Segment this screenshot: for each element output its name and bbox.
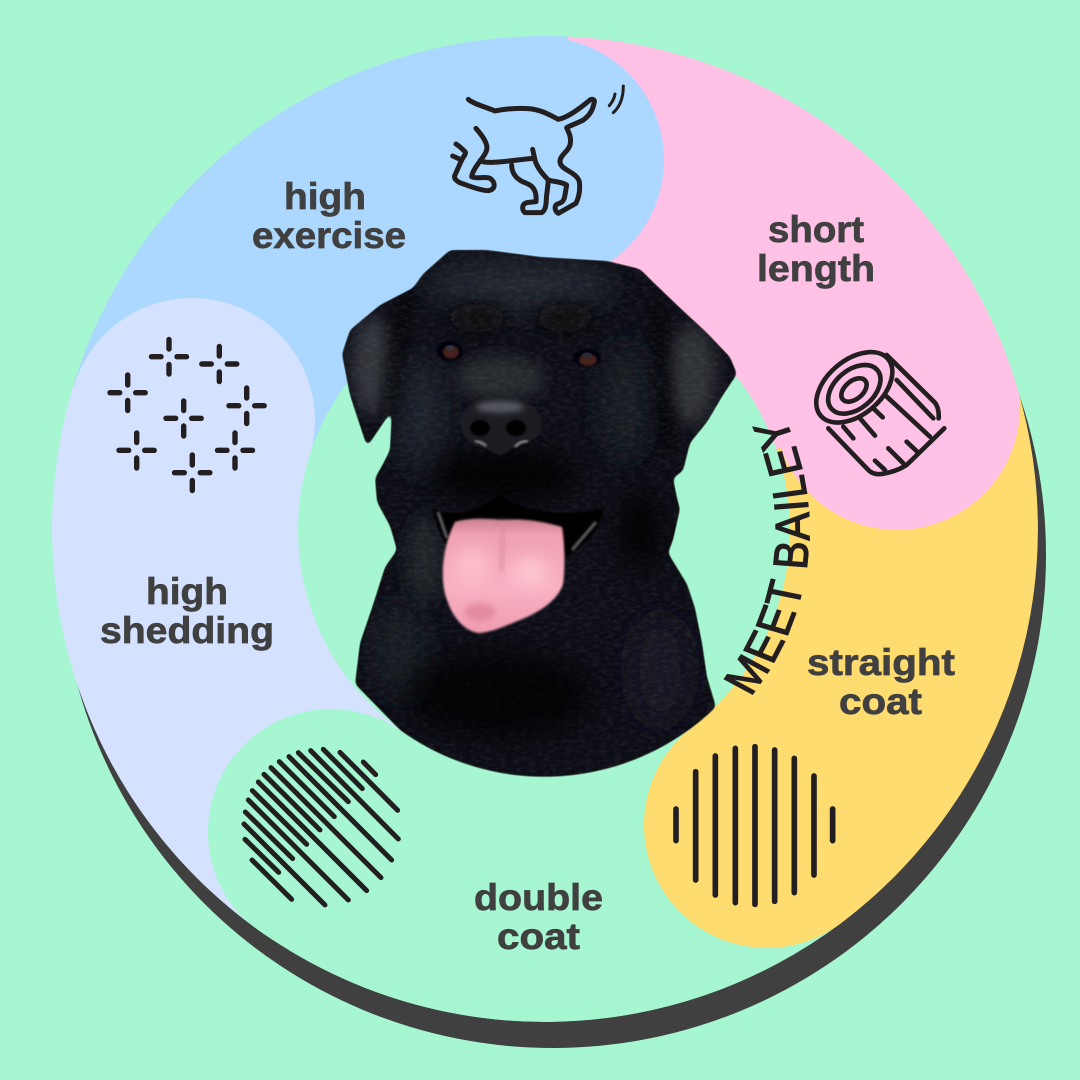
mouth xyxy=(433,494,604,558)
dog portrait xyxy=(330,240,750,780)
segment head: double coat xyxy=(208,709,403,942)
tongue xyxy=(443,519,564,633)
label: double coat: coat xyxy=(497,916,580,957)
segment body: double coat xyxy=(262,726,842,1022)
label: double coat xyxy=(474,877,603,957)
icon: double coat diagonal hatching xyxy=(244,749,398,905)
icon: dog wagging tail xyxy=(453,86,623,213)
segment body: short length xyxy=(568,36,1011,450)
eye left xyxy=(437,341,463,361)
label: high exercise: exercise xyxy=(252,215,406,256)
label: straight coat xyxy=(807,642,955,722)
label: high shedding: high xyxy=(146,571,228,612)
segment body: high exercise xyxy=(74,36,568,452)
label: high exercise: high xyxy=(284,176,366,217)
segment head: short length xyxy=(781,341,1020,530)
label: high shedding: shedding xyxy=(100,610,274,651)
fur texture xyxy=(343,250,732,776)
fur shading xyxy=(330,240,750,780)
label: high exercise xyxy=(252,176,406,256)
icon: log shaped tape measure xyxy=(803,338,944,474)
nose xyxy=(460,398,542,455)
segment body: straight coat xyxy=(694,368,1038,923)
icon: shedding sparkles xyxy=(110,340,264,490)
segment head: high exercise xyxy=(558,40,664,262)
segment head: straight coat xyxy=(644,726,848,948)
dog silhouette xyxy=(342,250,737,777)
label: straight coat: coat xyxy=(839,681,922,722)
centre hole xyxy=(298,284,790,776)
label: straight coat: straight xyxy=(807,642,955,683)
curved title: meet bailey: MEET BAILEY xyxy=(724,426,810,695)
icon: straight coat vertical lines xyxy=(676,747,833,904)
label: short length xyxy=(757,209,875,289)
segment body: high shedding xyxy=(52,385,403,933)
label: short length: length xyxy=(757,248,875,289)
label: short length: short xyxy=(768,209,864,250)
label: double coat: double xyxy=(474,877,603,918)
eye right xyxy=(573,349,601,367)
segment head: high shedding xyxy=(74,298,315,457)
label: high shedding xyxy=(100,571,274,651)
